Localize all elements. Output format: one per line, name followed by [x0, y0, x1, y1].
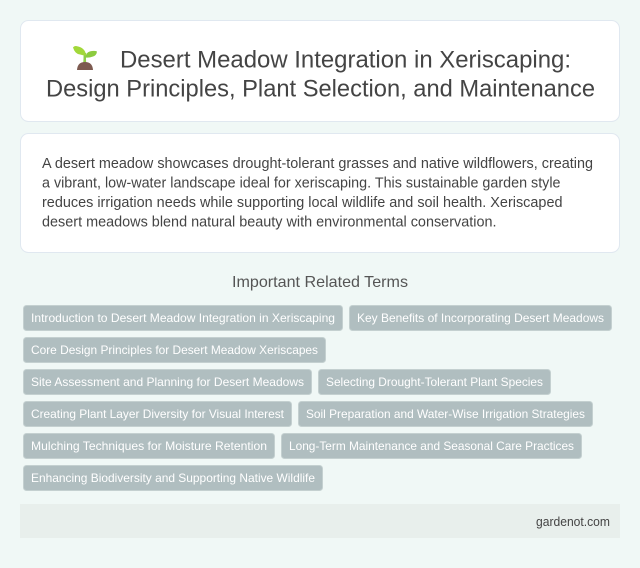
tag: Long-Term Maintenance and Seasonal Care Practices	[289, 439, 574, 453]
tag	[24, 370, 312, 394]
tag: Core Design Principles for Desert Meadow Xeriscapes	[31, 343, 318, 357]
title panel	[20, 20, 620, 122]
tag: Creating Plant Layer Diversity for Visual Interest	[31, 407, 285, 421]
description panel	[20, 134, 620, 252]
description text: A desert meadow showcases drought-tolerant grasses and native wildflowers, creating	[42, 155, 593, 172]
tag: Selecting Drought-Tolerant Plant Species	[326, 375, 543, 389]
heading: important related terms: Important Related Terms	[232, 274, 408, 291]
tag: Key Benefits of Incorporating Desert Meadows	[357, 311, 604, 325]
tag	[282, 434, 582, 458]
tag: Mulching Techniques for Moisture Retention	[31, 439, 267, 453]
tag	[24, 338, 326, 362]
tag	[318, 370, 550, 394]
footer	[20, 504, 620, 538]
title text: Desert Meadow Integration in Xeriscaping:	[120, 46, 571, 74]
tag: Enhancing Biodiversity and Supporting Native Wildlife	[31, 471, 315, 485]
title text: Design Principles, Plant Selection, and Maintenance	[46, 76, 595, 102]
description text: desert meadows blend natural beauty with environmental conservation.	[42, 214, 496, 230]
footer: gardenot.com	[536, 514, 610, 529]
tag	[350, 306, 612, 330]
tag	[298, 402, 592, 426]
description text	[42, 155, 593, 230]
tag: Site Assessment and Planning for Desert Meadows	[31, 375, 304, 389]
tag: Soil Preparation and Water-Wise Irrigation Strategies	[306, 407, 585, 421]
tag	[24, 466, 322, 490]
tag: Introduction to Desert Meadow Integration in Xeriscaping	[31, 311, 335, 325]
description text: reduces irrigation needs while supporting local wildlife and soil health. Xeriscaped	[42, 194, 562, 211]
tag	[24, 306, 342, 330]
icon: seedling	[73, 46, 97, 70]
tag	[24, 402, 292, 426]
description text: a vibrant, low-water landscape ideal for xeriscaping. This sustainable garden style	[42, 174, 560, 192]
tag	[24, 434, 274, 458]
title text	[46, 46, 595, 102]
tag list	[24, 306, 612, 490]
